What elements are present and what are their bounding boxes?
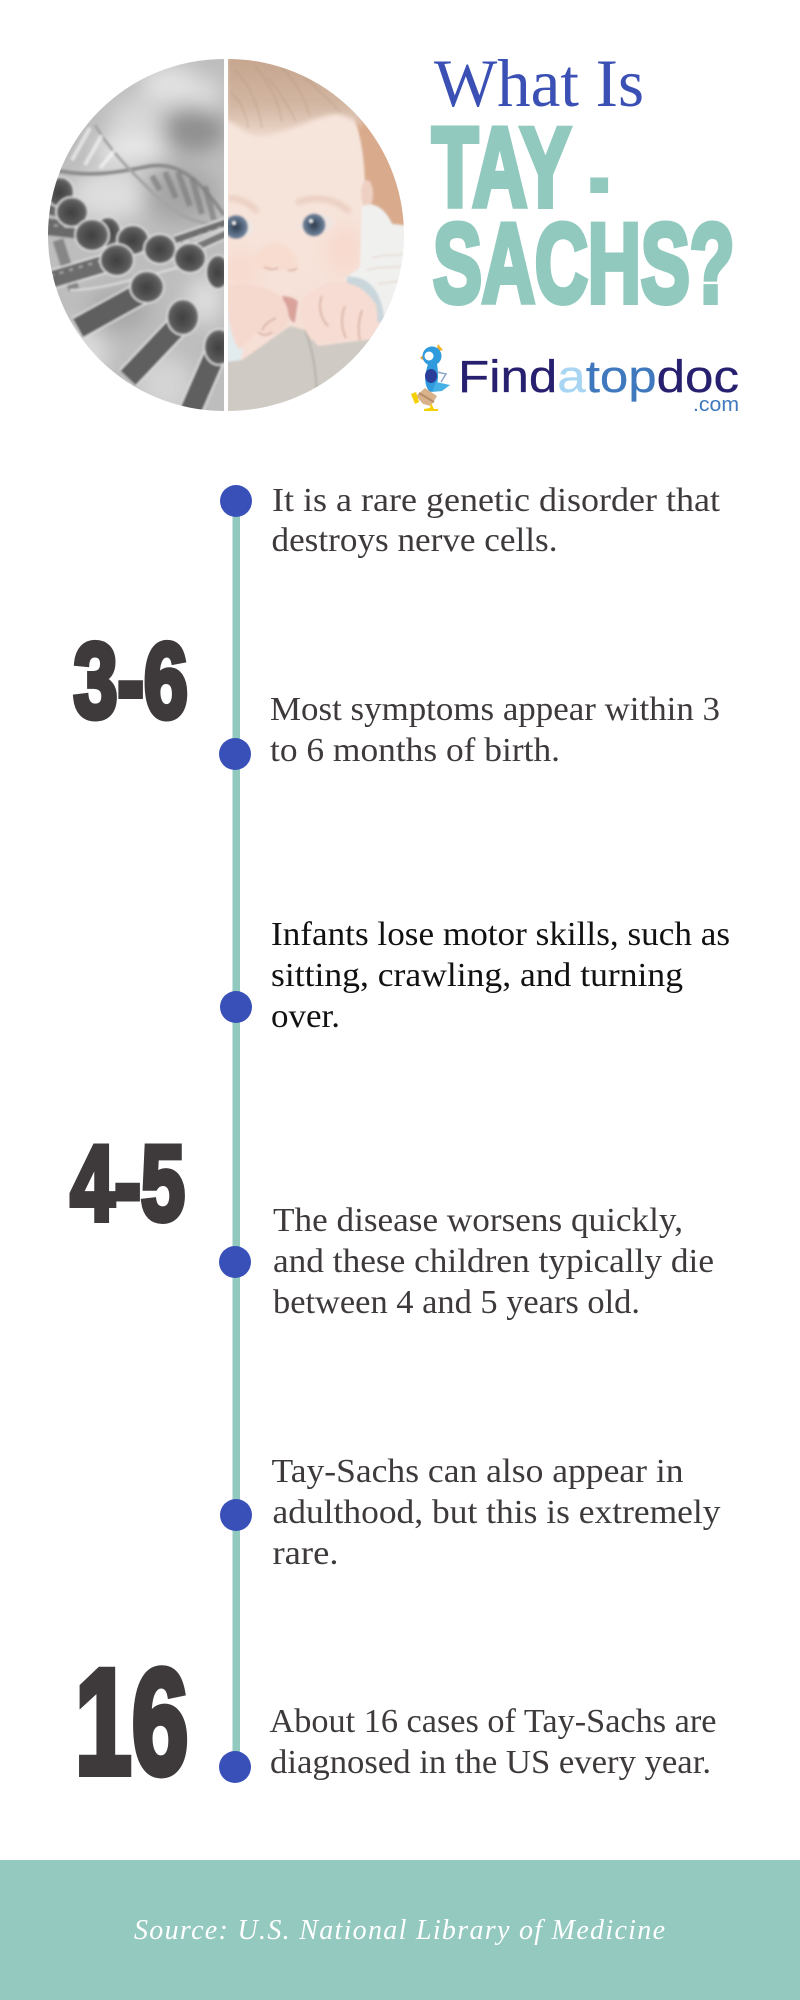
text: symptoms appear: to 6 months of birth. [270,732,560,769]
lips [282,296,298,322]
background behind baby [354,116,404,226]
footer source: Source: U.S. National Library of Medicine [134,1915,665,1946]
text: adulthood: adulthood, but this is extremely [272,1494,720,1531]
fabric [228,326,370,411]
text: symptoms appear: Most symptoms appear within 3 [270,691,720,728]
brows [296,199,350,212]
photo: DNA and baby circle [40,50,416,420]
face shading [332,233,358,268]
stat: 3-6: 3-6 [74,621,188,740]
knobs [46,177,234,365]
icon: duck mascot [411,344,450,411]
nose [260,245,296,268]
photo: baby half [228,59,404,411]
right fist [300,282,378,342]
text: motor skills: sitting, crawling, and turning [271,957,683,994]
stem highlights [44,224,224,276]
DNA helix [55,125,224,225]
title: SACHS?: SACHS? [433,201,735,327]
text: 16 cases: About 16 cases of Tay-Sachs are [270,1703,716,1740]
text: disease worsens: between 4 and 5 years old. [273,1284,640,1321]
text: adulthood: rare. [272,1535,338,1572]
hair [228,59,363,136]
text: disease worsens: The disease worsens quickly, [273,1202,683,1239]
text: 16 cases: diagnosed in the US every year. [270,1744,711,1781]
timeline bullets [219,485,252,1783]
footer band [0,1860,800,2000]
text: disease worsens [273,1202,714,1321]
title: TAY -: TAY - [432,106,608,231]
ear [361,180,373,208]
text: adulthood: Tay-Sachs can also appear in [272,1453,684,1490]
timeline line [232,501,240,1767]
eyes [325,218,332,230]
cuff [347,281,380,322]
logo .com: .com [693,394,739,416]
title: What Is: What Is [434,45,644,121]
text: motor skills [271,916,730,1035]
sleeve [346,203,404,316]
stat: 4-5: 4-5 [70,1123,185,1243]
left sleeve [228,314,244,362]
text: motor skills: over. [271,998,340,1035]
logo: Findatopdoc [411,344,739,416]
photo: grayscale DNA half [48,59,224,411]
left fist [228,290,289,350]
text: symptoms appear [270,691,720,769]
text: rare genetic disorder: destroys nerve cells. [272,522,558,559]
stat: 16: 16 [75,1639,188,1806]
text: disease worsens: and these children typically die [273,1243,714,1280]
text: rare genetic disorder: It is a rare genetic disorder that [272,482,721,519]
logo wordmark: Find atopdoc [458,351,739,402]
stems [40,205,228,412]
text: rare genetic disorder [272,482,721,559]
text: motor skills: Infants lose motor skills, such as [271,916,730,953]
text: adulthood [272,1453,720,1572]
text: 16 cases [270,1703,716,1781]
